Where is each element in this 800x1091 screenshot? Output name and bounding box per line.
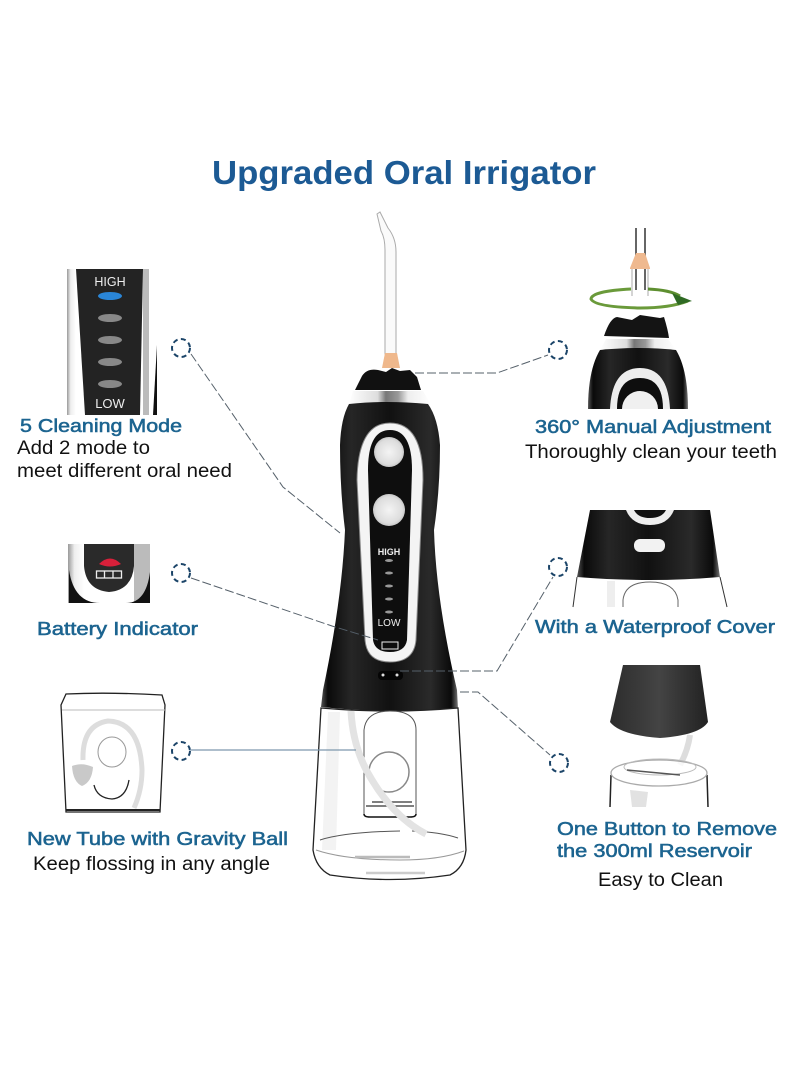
inset: 5 cleaning modes [67,269,157,415]
callout marker: modes [172,339,190,357]
label: new tube: Keep flossing in any angle [33,854,270,875]
callout marker: reservoir [550,754,568,772]
label: one button reservoir: One Button to Remove [557,818,777,839]
label: one button reservoir: the 300ml Reservoir [557,840,752,861]
upper button [374,437,404,467]
label: 360 manual adjustment: Thoroughly clean your teeth [525,442,777,463]
label: 5 cleaning mode: meet different oral need [17,461,232,482]
leader line: reservoir [460,692,550,755]
leader line: modes [191,354,340,533]
inset: tube with gravity ball [61,693,165,812]
callout marker: waterproof [549,558,567,576]
callout marker: 360 adjustment [549,341,567,359]
charge dots [378,671,403,680]
reservoir [313,708,466,880]
label: battery indicator: Battery Indicator [37,618,198,639]
inset: removable reservoir [610,665,708,807]
leader line: waterproof [400,577,553,671]
nozzle collar [382,353,400,368]
callout marker: tube [172,742,190,760]
title: Upgraded Oral Irrigator [212,154,596,191]
leader line: 360 adjustment [415,355,548,373]
label: new tube [27,828,288,875]
main product: water flosser: LOW [378,618,401,629]
handle body [321,402,458,711]
label: one button reservoir: Easy to Clean [598,870,723,891]
lower button [373,494,405,526]
label: 5 cleaning mode: Add 2 mode to [17,438,150,459]
label: 360 manual adjustment [525,416,777,463]
inset: 5 cleaning modes: HIGH [94,275,126,289]
panel labels: HIGH [378,547,400,557]
inset: 5 cleaning modes: LOW [95,396,126,411]
label: 360 manual adjustment: 360° Manual Adjustment [535,416,771,437]
label: waterproof cover: With a Waterproof Cover [535,616,775,637]
label: one button reservoir [557,818,777,891]
callout marker: battery [172,564,190,582]
cap [355,368,421,390]
inset: battery indicator [68,544,150,603]
nozzle [377,212,396,354]
inset: 360 degree adjustment [588,228,692,409]
leader line: battery [191,578,378,640]
neck band [349,391,431,405]
label: 5 cleaning mode [17,415,232,482]
control panel [357,423,423,662]
label: new tube: New Tube with Gravity Ball [27,828,288,849]
label: 5 cleaning mode: 5 Cleaning Mode [20,415,182,436]
inner tube [351,711,426,834]
inset: waterproof cover [573,510,727,607]
leader line: tube [190,749,356,751]
main product: water flosser [313,212,466,880]
